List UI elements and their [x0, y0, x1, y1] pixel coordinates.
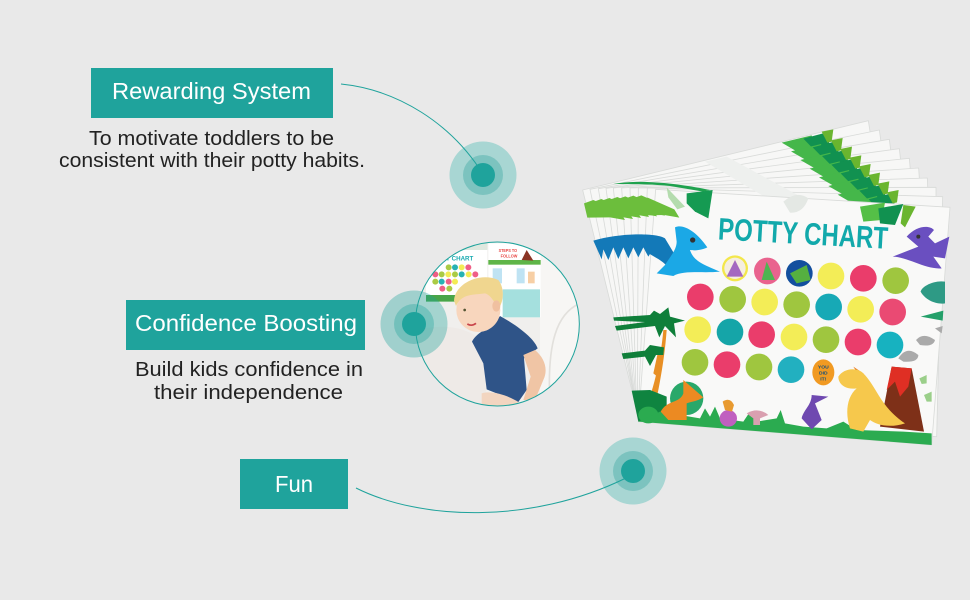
title: POTTY CHART: [717, 211, 889, 256]
sticker circles row 3: [684, 316, 903, 358]
connector: fun: [356, 478, 626, 513]
text: rewarding description: consistent with their potty habits.: [59, 150, 365, 172]
mushroom: [747, 410, 768, 425]
yellow dinosaur: [838, 367, 905, 432]
text: confidence description: [135, 359, 363, 404]
volcano: [880, 367, 924, 432]
back card leaf strips, right: [782, 129, 899, 212]
sticker circles row 4: IT!: [820, 376, 827, 382]
palm trees: [613, 307, 685, 395]
label: rewarding system: [91, 68, 333, 118]
purple pterodactyl: [893, 227, 949, 268]
potty chart fan: [583, 121, 950, 445]
right side leaves and smoke: [898, 281, 945, 402]
sticker circles row 4: YOU: [818, 364, 829, 370]
connector: rewarding system: [341, 84, 479, 168]
faded leaves on back cards: [705, 157, 810, 212]
photo: toddler on potty: FOLLOW: [501, 254, 518, 260]
arm: [523, 350, 546, 400]
top left leaves: [613, 182, 713, 218]
label: fun: Fun: [275, 471, 313, 497]
faded leaf: [783, 195, 808, 213]
text: rewarding description: [59, 128, 365, 172]
photo: toddler on potty: STEPS TO: [499, 248, 517, 254]
top right leaves: [860, 203, 916, 227]
text: confidence description: Build kids confidence in: [135, 359, 363, 381]
orange dinosaur: [661, 380, 703, 420]
head: [456, 293, 500, 332]
front card: [638, 189, 950, 445]
blue pterodactyl: [593, 226, 720, 276]
shirt: [472, 316, 538, 402]
label: confidence boosting: Confidence Boosting: [135, 310, 357, 336]
pin: confidence: [380, 290, 448, 358]
sticker circles row 2: [687, 284, 906, 325]
label: rewarding system: Rewarding System: [112, 78, 311, 104]
pin: fun: [600, 438, 666, 504]
bottom grass: [638, 407, 932, 445]
text: confidence description: their independence: [154, 382, 343, 404]
photo: toddler on potty: TTY CHART: [438, 256, 473, 263]
label: confidence boosting: [126, 300, 365, 350]
purple dinosaur: [802, 395, 828, 429]
sticker circles row 4: [682, 349, 834, 385]
photo: toddler on potty: [413, 240, 583, 410]
text: rewarding description: To motivate toddlers to be: [89, 128, 334, 150]
left fronds: [584, 195, 679, 220]
sticker circles row 1: [722, 255, 909, 294]
pin: rewarding: [450, 142, 516, 208]
sticker circles row 4: DID: [819, 370, 828, 376]
fanned back cards: [583, 121, 943, 437]
bushes: [632, 382, 703, 423]
label: fun: [240, 459, 348, 509]
baby dinosaur egg: [720, 400, 737, 427]
